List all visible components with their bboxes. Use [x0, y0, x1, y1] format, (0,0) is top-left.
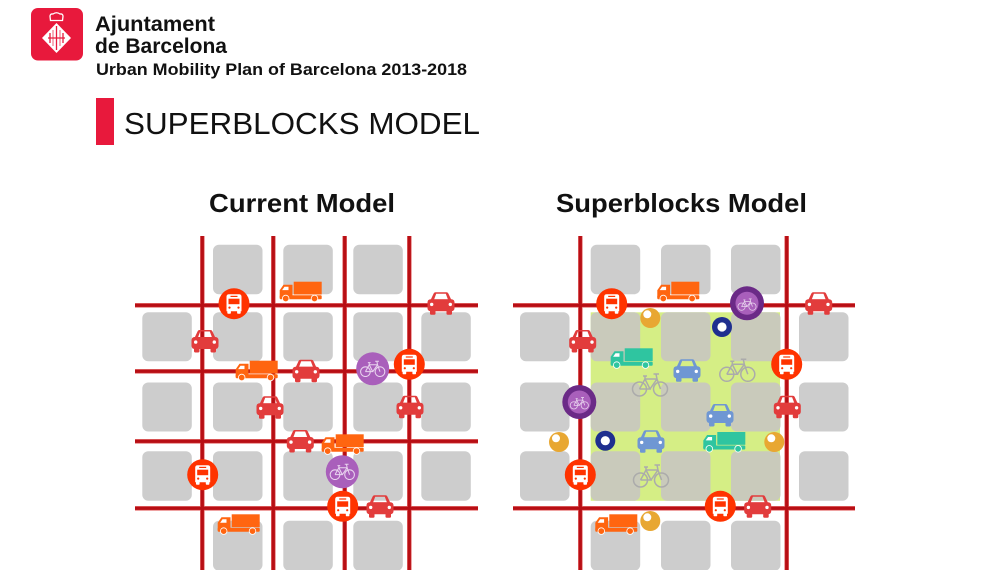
icon: car — [774, 396, 801, 418]
icon: car — [292, 360, 320, 382]
icon: teal truck — [703, 432, 745, 452]
icon: orange stop — [640, 308, 660, 328]
panel: superblocks model diagram — [513, 236, 855, 570]
icon: teal truck — [611, 348, 653, 368]
icon: blue car — [706, 404, 734, 426]
icon: blue car — [674, 359, 700, 382]
icon: car — [805, 292, 832, 315]
icon: car — [256, 396, 284, 419]
perimeter roads — [513, 236, 855, 570]
icon: orange stop — [640, 511, 660, 531]
main title: SUPERBLOCKS MODEL — [124, 106, 480, 141]
logo: Ajuntament de Barcelona crest — [31, 8, 83, 60]
organisation name: de Barcelona — [95, 35, 227, 58]
panel: current model diagram — [135, 236, 478, 570]
icon: car — [428, 292, 454, 315]
icon: car — [569, 330, 596, 352]
icon: bike — [326, 455, 359, 488]
icon: car — [744, 495, 771, 518]
green pedestrian streets — [591, 312, 780, 501]
icon: orange stop — [764, 432, 784, 452]
icon: grey bike — [634, 465, 668, 487]
icon: orange truck — [595, 514, 637, 534]
icon: bus — [565, 459, 596, 490]
blocks inside the superblock — [591, 312, 780, 501]
icon: bus — [327, 491, 358, 522]
icon: bus — [394, 349, 425, 380]
heading: Superblocks Model: Superblocks Model — [556, 188, 807, 218]
plan subtitle: Urban Mobility Plan of Barcelona 2013-2018 — [96, 61, 467, 79]
icon: car — [366, 495, 394, 518]
title accent bar — [96, 98, 114, 145]
road grid — [135, 236, 478, 570]
icon: grey bike — [632, 374, 668, 396]
icon: bus — [187, 459, 218, 490]
icon: truck — [218, 514, 260, 534]
icon: cycle hub — [730, 286, 764, 320]
city blocks — [142, 245, 471, 570]
icon: truck — [236, 361, 278, 381]
icon: bus — [705, 491, 736, 522]
icon: bus — [218, 288, 250, 319]
icon: car — [287, 430, 314, 452]
icon: navy stop — [712, 317, 732, 337]
organisation name — [95, 13, 227, 58]
icon: truck — [280, 282, 322, 302]
city blocks — [520, 245, 848, 570]
icon: orange truck — [657, 282, 699, 302]
icon: bus — [771, 349, 802, 380]
heading: Current Model: Current Model — [209, 188, 395, 218]
icon: truck — [322, 434, 364, 454]
organisation name: Ajuntament — [95, 13, 215, 36]
icon: cycle hub — [562, 385, 596, 419]
icon: grey bike — [720, 359, 755, 381]
icon: navy stop — [595, 431, 615, 451]
icon: orange stop — [549, 432, 569, 452]
icon: bike — [356, 352, 389, 385]
icon: car — [396, 396, 424, 418]
icon: car — [192, 330, 218, 352]
icon: bus — [596, 288, 627, 319]
icon: blue car — [638, 430, 664, 453]
